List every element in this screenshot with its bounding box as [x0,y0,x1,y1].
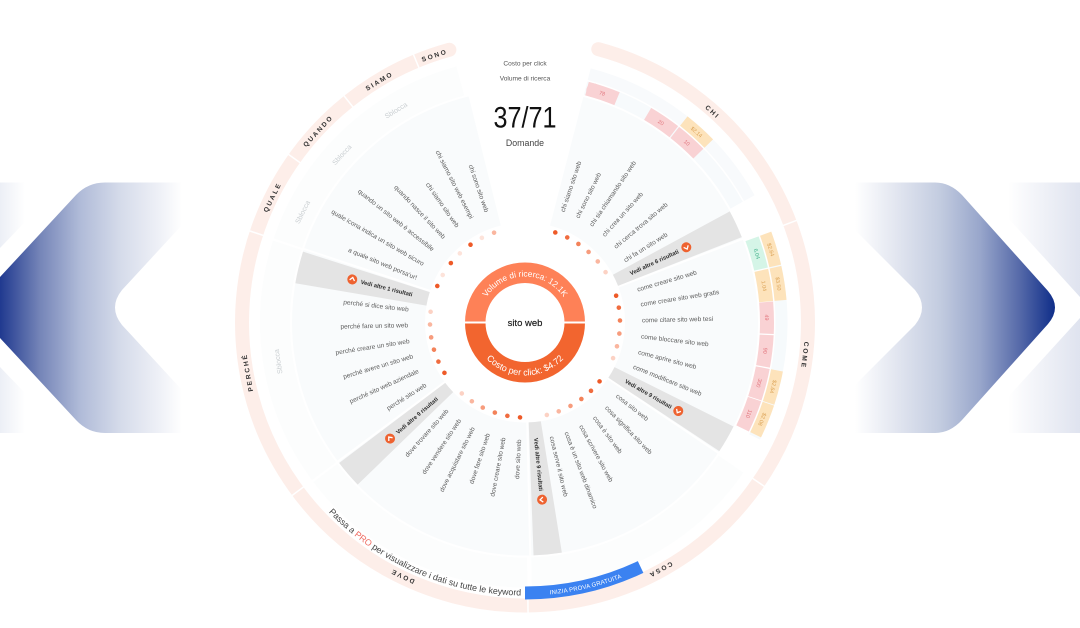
questions: COSA: cosa è un sito web dinamico [563,431,598,510]
header legend: Volume di ricerca [500,76,551,82]
locked labels: Sblocca [295,200,312,225]
questions: COME [632,269,720,398]
questions: PERCHÉ: perché avere un sito web [342,353,414,381]
center donut: sito web [508,318,542,329]
questions: QUALE, QUANDO, SIAMO, SONO [330,149,490,282]
questions: COME: come creare sito web [636,269,698,294]
category labels on ring [239,48,809,585]
metric values: $3.50 [774,277,782,291]
questions: QUALE, QUANDO, SIAMO, SONO: a quale sito web porsa'ur! [347,247,418,282]
questions: DOVE: dove trovare sito web [404,408,451,459]
center donut: Volume di ricerca: 12.1K [482,270,568,297]
questions: DOVE: dove sito web [514,439,523,479]
metric values: 6.04 [752,248,760,260]
locked pale outer cells [275,74,781,572]
questions: DOVE: dove acquistare sito web [439,426,477,493]
questions: PERCHÉ [335,299,428,412]
questions: COSA: cosa è sito web [591,415,623,456]
locked labels: Sblocca [274,349,284,374]
metric values: 300 [754,378,762,388]
see more: PERCHÉ [346,273,414,299]
questions: PERCHÉ: perché creare un sito web [335,338,410,357]
center donut: Costo per click: $4.72 [488,355,564,376]
questions: COME: come creare sito web gratis [640,289,720,308]
see more: COSA: Vedi altre 9 risultati [532,438,543,492]
questions: CHI: chi siamo sito web [560,160,583,213]
questions: QUALE, QUANDO, SIAMO, SONO: chi siamo sito web esempi [434,149,474,220]
questions: PERCHÉ: perché si dice sito web [343,299,409,314]
metric values: $2.08 [756,412,767,426]
locked labels: Sblocca [332,144,354,167]
outer category ring [242,49,808,614]
questions: QUALE, QUANDO, SIAMO, SONO: chi siamo sito web [424,182,460,229]
category labels on ring: SIAMO [365,71,395,93]
questions: COSA [548,393,653,510]
questions: QUALE, QUANDO, SIAMO, SONO: quando un sito web è accessibile [356,188,435,253]
metric values: 49 [763,314,769,321]
questions: COME: come bloccare sito web [641,333,709,348]
PRO upsell arc text: Passa a PRO per visualizzare i dati su tutte le keyword [329,508,521,596]
questions: COME: come modificare sito web [632,364,703,398]
questions: COSA: cosa significa sito web [603,405,653,456]
metric cells: COME [743,234,781,435]
right chevron decoration [855,182,1080,433]
questions: COSA: cosa sito web [614,393,650,423]
header legend [500,60,551,82]
questions: COME: come aprire sito web [637,349,697,371]
see more: COSA [531,437,548,505]
category labels on ring: QUANDO [302,114,335,149]
metric values: 78 [598,90,606,98]
questions: CHI: chi fa un sito web [623,231,669,264]
free trial button: INIZIA PROVA GRATUITA [550,574,622,594]
category labels on ring: SONO [421,48,449,64]
metric values: 90 [761,347,768,354]
category labels on ring: COSA [647,560,673,579]
see more: DOVE: Vedi altre 9 risultati [396,396,440,436]
see more: COME [623,376,685,418]
see more: PERCHÉ: Vedi altre 1 risultati [360,280,413,299]
questions: DOVE [404,408,523,497]
questions: CHI: chi cerca trova sito web [613,201,670,251]
questions: QUALE, QUANDO, SIAMO, SONO: chi sono sito web [467,164,490,214]
dots ring [428,230,622,420]
free trial button [525,561,644,600]
category labels on ring: DOVE [389,567,416,585]
category labels on ring: COME [799,341,809,369]
questions: DOVE: dove vendere sito web [421,418,463,476]
questions: DOVE: dove fare sito web [469,432,492,485]
header legend: Costo per click [503,60,547,68]
left chevron decoration [0,182,182,433]
questions: PERCHÉ: perché fare un sito web [340,322,408,331]
center donut [465,262,585,382]
metric values: $2.64 [768,379,777,394]
locked labels [274,102,409,374]
metric values: $2.14 [689,126,703,139]
metric cells: CHI [585,82,709,154]
questions: PERCHÉ: perché sito web aziendale [349,368,420,406]
questions: CHI: chi sono sito web [575,171,603,220]
category labels on ring: PERCHÉ [239,353,255,392]
questions: QUALE, QUANDO, SIAMO, SONO: quale icona indica un sito web sicuro [330,209,425,268]
counter caption: Domande [506,138,544,148]
questions: PERCHÉ: perché sito web [386,382,428,412]
metric values: 1.04 [759,280,767,292]
questions: COME: come citare sito web tesi [642,316,713,324]
category labels on ring: CHI [703,104,721,121]
questions: DOVE: dove creare sito web [489,437,508,497]
questions: COSA: cosa scrivere sito web [577,424,614,484]
questions: CHI: chi crea un sito web [601,191,645,238]
metric values [598,90,782,426]
questions: COSA: cosa serve il sito web [548,436,569,498]
metric values: 10 [682,139,690,148]
question counter: 37/71 [494,102,556,134]
metric values: $2.64 [765,243,775,257]
pale question sectors [303,161,743,556]
questions: CHI: chi sia chiamando sito web [589,160,638,228]
gray expand bands [360,243,680,489]
questions: QUALE, QUANDO, SIAMO, SONO: quando nasce il sito web [392,184,447,241]
see more: CHI: Vedi altre 6 risultati [629,249,680,277]
see more: COME: Vedi altre 9 risultati [623,379,673,411]
see more: DOVE [383,394,441,446]
metric values: 110 [744,408,753,419]
see more: CHI [628,241,693,278]
locked labels: Sblocca [384,102,409,120]
metric values: 20 [656,119,665,127]
questions: CHI [560,160,670,264]
category labels on ring: QUALE [263,181,284,214]
